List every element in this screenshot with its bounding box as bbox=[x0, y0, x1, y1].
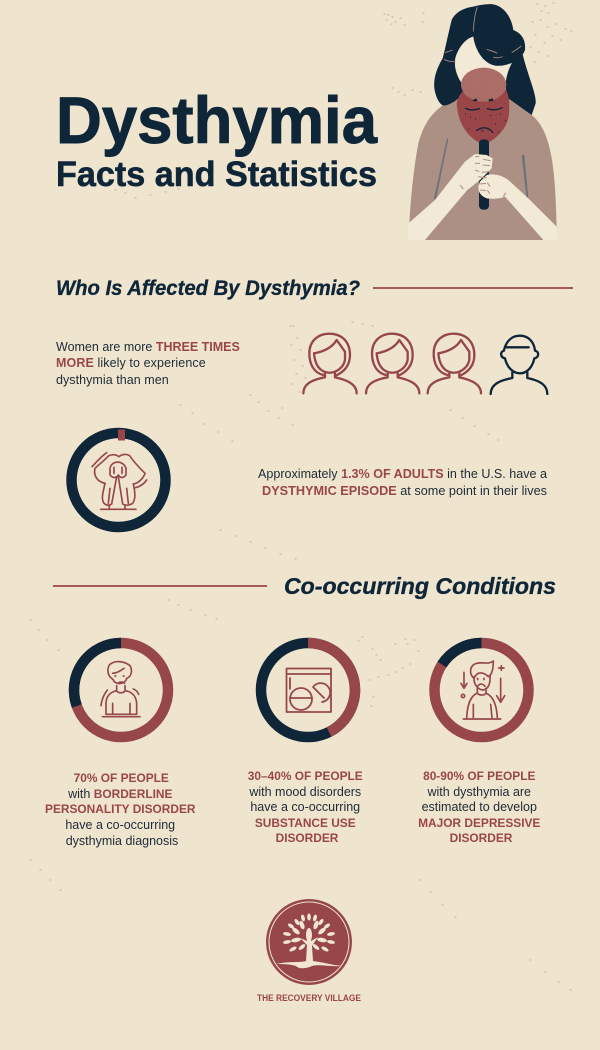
caption: 30-40 percent: DISORDER bbox=[276, 831, 339, 845]
caption: 70 percent: have a co-occurring bbox=[65, 818, 175, 832]
title: Facts and Statistics bbox=[56, 155, 377, 194]
title: Dysthymia bbox=[56, 83, 378, 157]
icon: person covering face bbox=[92, 453, 147, 509]
caption: 30-40 percent: have a co-occurring bbox=[250, 800, 360, 814]
text: women three times: dysthymia than men bbox=[56, 373, 169, 387]
caption: 80-90 percent: 80-90% OF PEOPLE bbox=[423, 769, 535, 783]
logo: the recovery village bbox=[257, 899, 361, 1003]
donut: 30-40 percent bbox=[261, 643, 355, 737]
text: 1.3% of adults: Approximately 1.3% OF ADULTS in the U.S. have a bbox=[258, 467, 547, 481]
icon: person with afro bbox=[101, 662, 140, 717]
icon: medicine box and pills bbox=[286, 668, 331, 712]
icon: woman 2 bbox=[366, 334, 419, 393]
heading: who is affected: Who Is Affected By Dysthymia? bbox=[56, 276, 360, 300]
icon: man bbox=[491, 336, 547, 394]
icon: sad man with down arrows bbox=[461, 661, 505, 719]
caption: 70 percent: 70% OF PEOPLE bbox=[74, 771, 169, 785]
caption: 30-40 percent: with mood disorders bbox=[248, 785, 361, 799]
caption: 70 percent: PERSONALITY DISORDER bbox=[45, 802, 196, 816]
title bbox=[56, 83, 378, 194]
illustration: woman holding mirror bbox=[408, 4, 558, 240]
caption: 80-90 percent: with dysthymia are bbox=[426, 785, 531, 799]
caption: 70 percent: dysthymia diagnosis bbox=[66, 834, 178, 848]
icon: woman 3 bbox=[428, 334, 481, 393]
caption: 70 percent: with BORDERLINE bbox=[68, 787, 172, 801]
donut: 1.3% of adults bbox=[72, 430, 166, 527]
icon: woman 1 bbox=[303, 334, 357, 393]
text: 1.3% of adults bbox=[258, 467, 547, 498]
caption: 30-40 percent: SUBSTANCE USE bbox=[255, 816, 356, 830]
icon: tree bbox=[276, 914, 342, 968]
text: women three times: Women are more THREE TIMES bbox=[56, 340, 240, 354]
icons: three women and one man bbox=[303, 334, 547, 394]
logo wordmark: THE RECOVERY VILLAGE bbox=[257, 993, 361, 1003]
donut: 80-90 percent bbox=[434, 643, 528, 737]
heading rule bbox=[53, 585, 267, 587]
heading rule bbox=[373, 287, 573, 289]
heading: co-occurring conditions: Co-occurring Conditions bbox=[284, 573, 556, 599]
caption: 30-40 percent: 30–40% OF PEOPLE bbox=[248, 769, 363, 783]
text: women three times: MORE likely to experience bbox=[56, 356, 206, 370]
caption: 80-90 percent: MAJOR DEPRESSIVE bbox=[418, 816, 540, 830]
caption: 80-90 percent: estimated to develop bbox=[422, 800, 537, 814]
caption: 80-90 percent: DISORDER bbox=[450, 831, 513, 845]
text: 1.3% of adults: DYSTHYMIC EPISODE at some point in their lives bbox=[262, 484, 547, 498]
text: women three times bbox=[56, 340, 240, 387]
donut: 70 percent bbox=[74, 643, 168, 737]
